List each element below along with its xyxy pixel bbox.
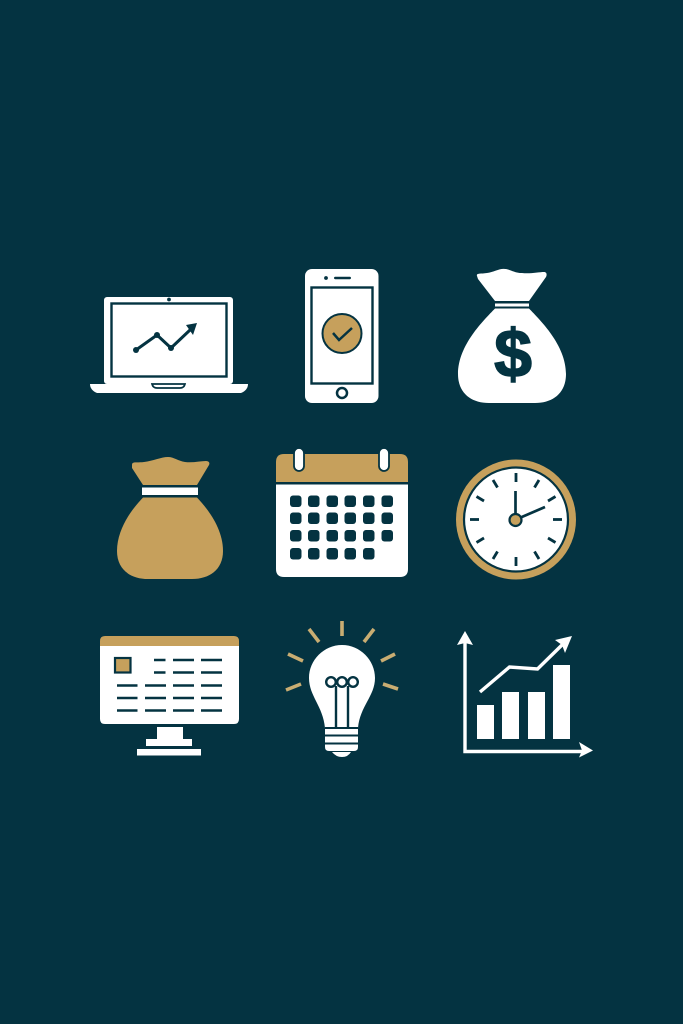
dollar sign: $ [494, 316, 532, 392]
icon: smartphone with check [305, 269, 378, 403]
date grid [290, 496, 393, 560]
icon: light bulb with rays [286, 621, 398, 757]
icon: growth bar chart [457, 631, 593, 758]
icon: laptop with trend line [90, 297, 248, 393]
icon: white money bag with dollar [458, 269, 566, 403]
icon: calendar [276, 448, 408, 577]
icon: desktop monitor with table [100, 636, 239, 756]
icon: tan money bag [117, 457, 223, 579]
icon: wall clock [456, 460, 576, 580]
